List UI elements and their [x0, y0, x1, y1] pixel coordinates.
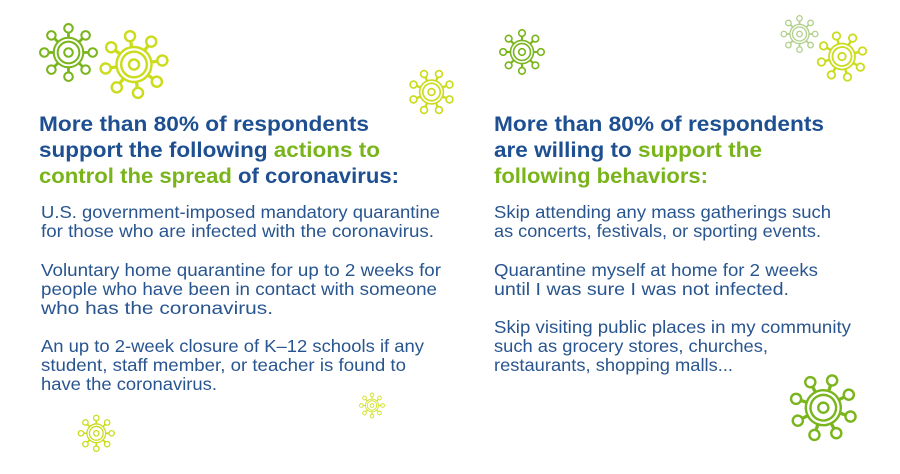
heading: right column: are willing to support the — [494, 138, 762, 162]
text block: voluntary quarantine: people who have been in contact with someone — [41, 279, 437, 299]
text block: skip mass gatherings — [494, 202, 831, 241]
icon: pale green virus top right — [781, 16, 818, 52]
text block: voluntary quarantine: who has the coronavirus. — [40, 298, 273, 318]
text block: quarantine at home — [494, 260, 818, 299]
icon: green virus bottom right — [781, 365, 866, 450]
text block: skip mass gatherings: Skip attending any mass gatherings such — [494, 202, 831, 222]
icon: small lime virus bottom centre — [360, 393, 384, 418]
icon: lime virus top right — [811, 26, 873, 87]
heading: left column: control the spread of coronavirus: — [39, 164, 399, 188]
icon: lime virus by left heading — [402, 62, 461, 122]
heading: right column — [494, 112, 824, 188]
text block: mandatory quarantine — [41, 202, 440, 241]
text block: school closure: student, staff member, or teacher is found to — [41, 355, 406, 375]
text block: skip public places: Skip visiting public places in my community — [494, 317, 851, 337]
text block: school closure: have the coronavirus. — [41, 374, 217, 394]
icon: green virus top left — [40, 24, 97, 81]
heading: right column: More than 80% of respondents — [494, 112, 824, 136]
heading: left column — [39, 112, 399, 188]
text block: school closure — [41, 336, 424, 394]
text block: mandatory quarantine: for those who are infected with the coronavirus. — [41, 221, 434, 241]
text block: school closure: An up to 2-week closure of K–12 schools if any — [41, 336, 424, 356]
text block: skip mass gatherings: as concerts, festivals, or sporting events. — [494, 221, 821, 241]
heading: right column: following behaviors: — [494, 164, 708, 188]
icon: lime virus bottom left — [78, 415, 114, 451]
text block: quarantine at home: until I was sure I was not infected. — [494, 279, 789, 299]
text block: voluntary quarantine — [40, 260, 441, 318]
text block: voluntary quarantine: Voluntary home quarantine for up to 2 weeks for — [41, 260, 441, 280]
text block: skip public places: restaurants, shopping malls... — [494, 355, 733, 375]
heading: left column: More than 80% of respondents — [39, 112, 369, 136]
icon: lime virus top left — [96, 26, 172, 103]
text block: skip public places — [494, 317, 851, 375]
heading: left column: support the following actions to — [39, 138, 380, 162]
text block: quarantine at home: Quarantine myself at home for 2 weeks — [494, 260, 818, 280]
text block: mandatory quarantine: U.S. government-imposed mandatory quarantine — [41, 202, 440, 222]
text block: skip public places: such as grocery stores, churches, — [494, 336, 768, 356]
icon: green virus top centre — [500, 30, 544, 74]
